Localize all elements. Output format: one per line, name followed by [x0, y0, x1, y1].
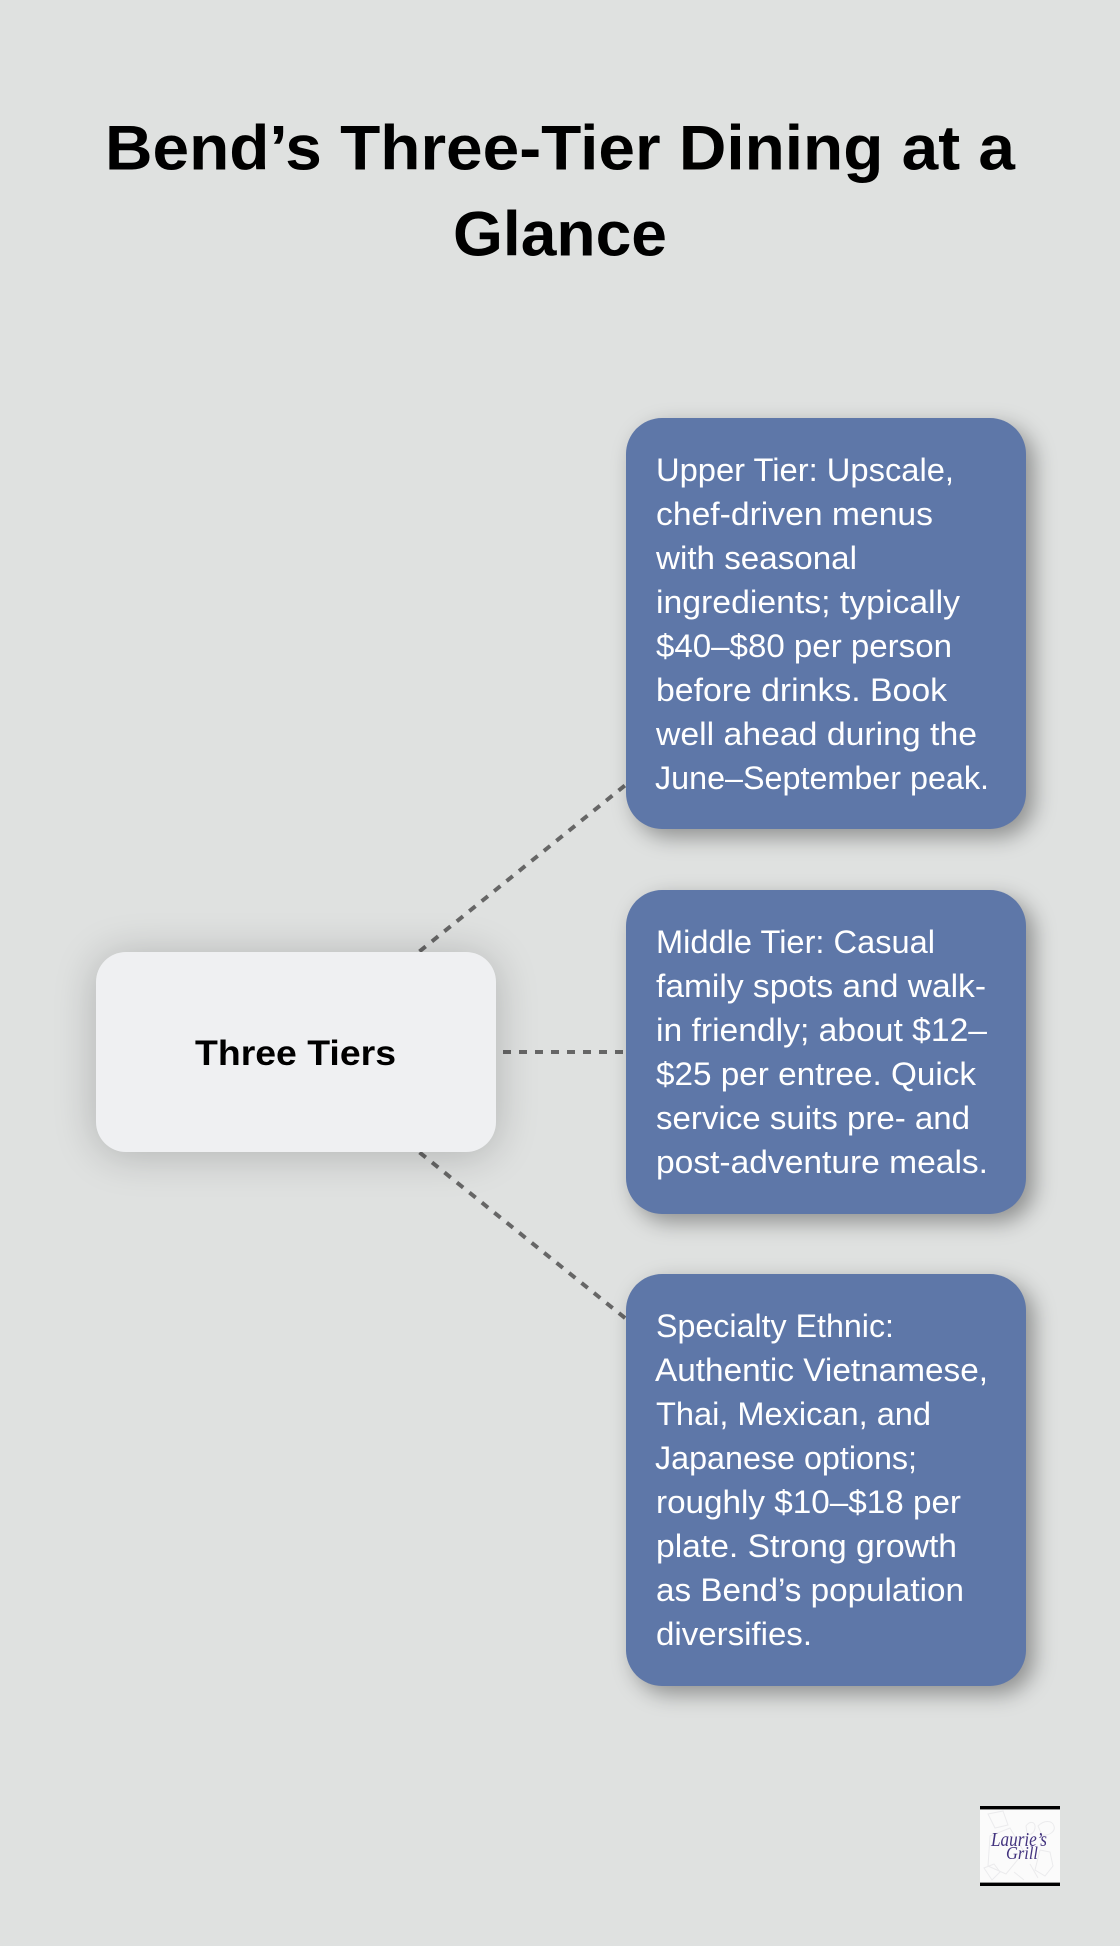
- text block: middle tier description: Middle Tier: Casual: [656, 924, 935, 960]
- text block: middle tier description: [656, 924, 988, 1180]
- panel: middle tier: [626, 890, 1026, 1214]
- text block: upper tier description: Upper Tier: Upscale,: [656, 452, 954, 488]
- text block: upper tier description: [655, 452, 989, 796]
- text block: specialty ethnic description: plate. Strong growth: [656, 1528, 957, 1564]
- text block: upper tier description: before drinks. Book: [656, 672, 948, 708]
- icon: Laurie's Grill logo: Laurie’s: [990, 1829, 1047, 1851]
- panel: specialty ethnic: [626, 1274, 1026, 1686]
- text block: middle tier description: post-adventure meals.: [656, 1144, 988, 1180]
- text block: middle tier description: $25 per entree. Quick: [656, 1056, 977, 1092]
- icon: Laurie's Grill logo: [980, 1806, 1060, 1886]
- icon: Laurie's Grill logo: Grill: [1006, 1843, 1038, 1863]
- text block: upper tier description: well ahead during the: [655, 716, 977, 752]
- text block: specialty ethnic description: Japanese options;: [655, 1440, 917, 1476]
- text block: upper tier description: $40–$80 per person: [656, 628, 952, 664]
- text block: specialty ethnic description: roughly $10–$18 per: [656, 1484, 961, 1520]
- text block: upper tier description: chef-driven menus: [656, 496, 933, 532]
- heading: Three Tiers: Three Tiers: [195, 1034, 396, 1073]
- text block: specialty ethnic description: Authentic Vietnamese,: [655, 1352, 988, 1388]
- panel: upper tier: [626, 418, 1026, 829]
- text block: specialty ethnic description: diversifies.: [656, 1616, 812, 1652]
- title: Glance: [453, 200, 667, 270]
- arrow: center to upper tier: [295, 623, 826, 1052]
- text block: specialty ethnic description: [655, 1308, 988, 1652]
- text block: middle tier description: service suits pre- and: [656, 1100, 970, 1136]
- text block: specialty ethnic description: Specialty Ethnic:: [656, 1308, 894, 1344]
- arrow: center to middle tier: [295, 1050, 826, 1054]
- text block: upper tier description: ingredients; typically: [656, 584, 960, 620]
- text block: specialty ethnic description: as Bend’s population: [656, 1572, 964, 1608]
- arrow: center to specialty ethnic: [295, 1052, 826, 1480]
- text block: middle tier description: family spots and walk-: [656, 968, 986, 1004]
- title: Bend’s Three-Tier Dining at a: [105, 114, 1016, 184]
- panel: Three Tiers center node: [96, 952, 496, 1152]
- text block: specialty ethnic description: Thai, Mexican, and: [656, 1396, 931, 1432]
- text block: upper tier description: with seasonal: [655, 540, 857, 576]
- title: [105, 114, 1016, 270]
- text block: middle tier description: in friendly; about $12–: [656, 1012, 987, 1048]
- text block: upper tier description: June–September peak.: [655, 760, 989, 796]
